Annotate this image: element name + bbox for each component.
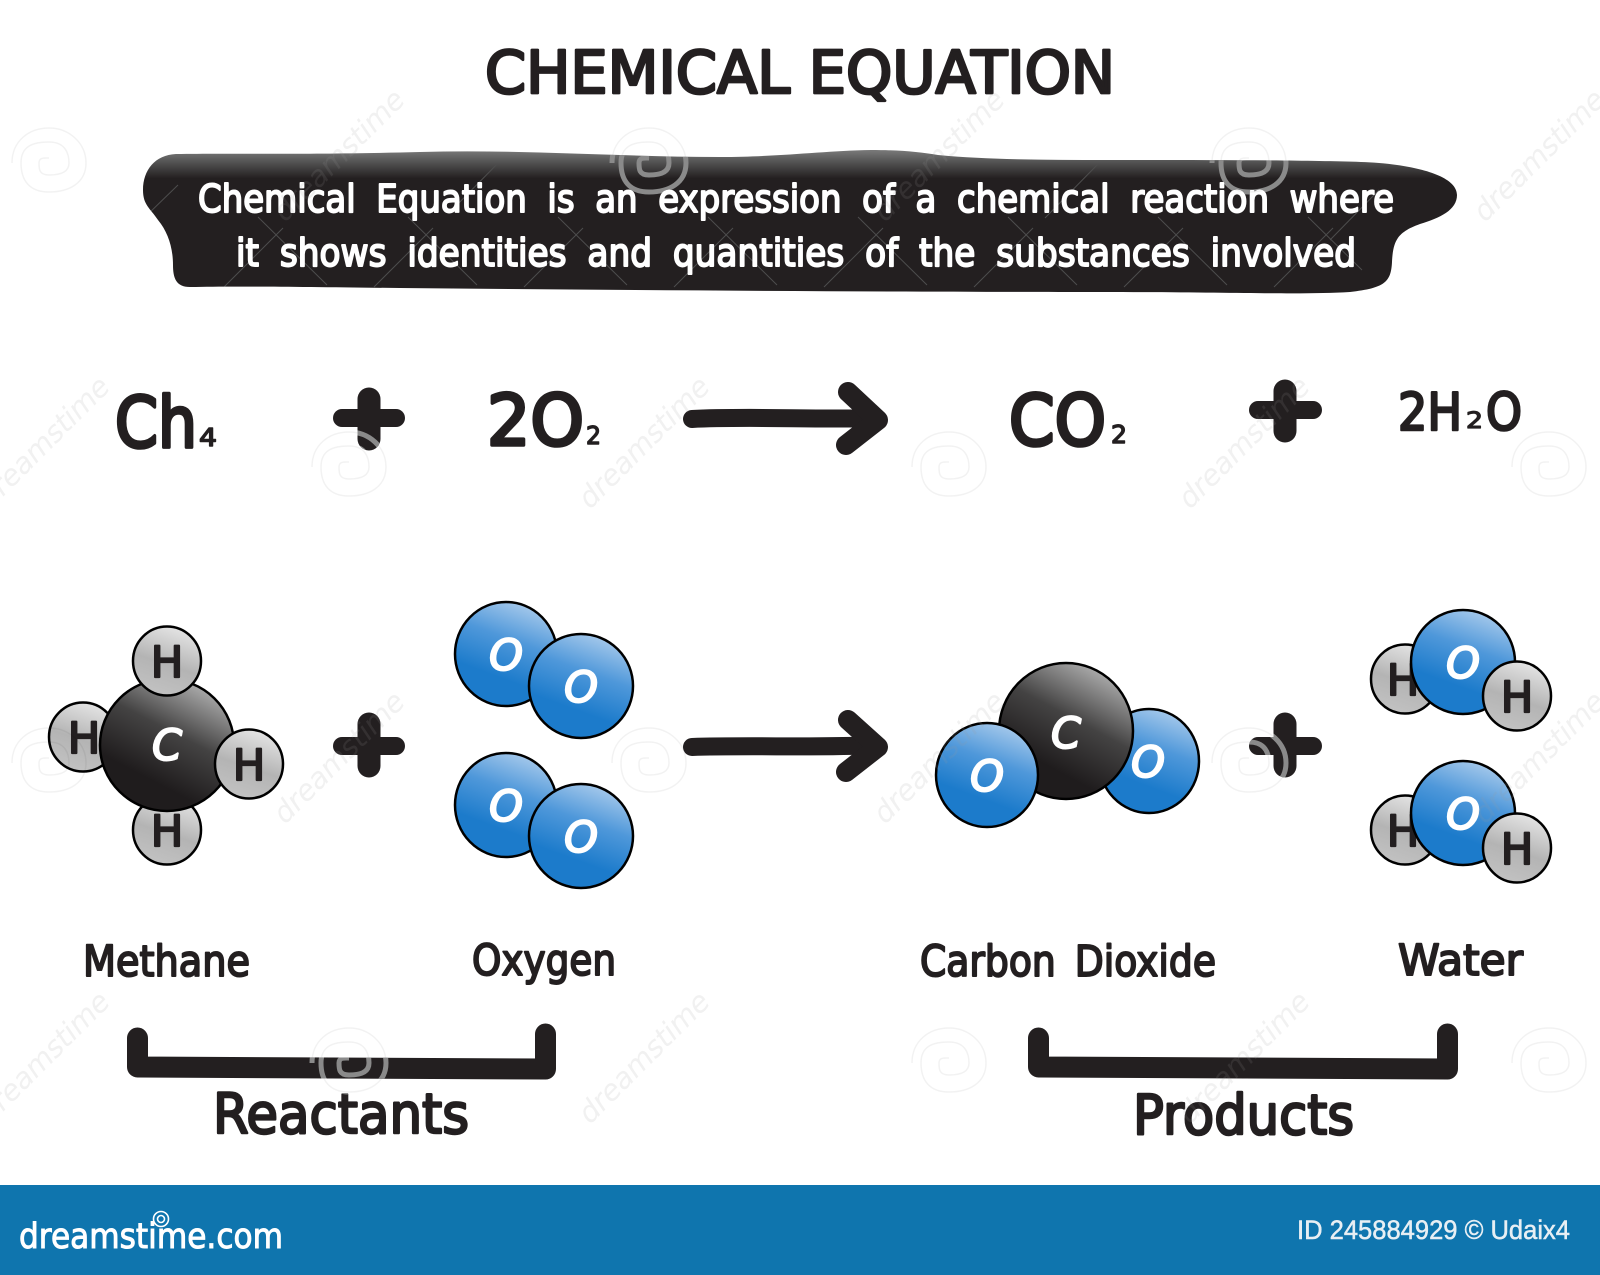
hydrogen atom left [49,702,117,772]
formula: 2H2O: 2 [1466,409,1483,434]
H2O molecule upper: O [1446,639,1480,689]
diagonal watermark text: dreamstime [866,684,1012,830]
footer bar [0,1185,1600,1275]
banner watermark lines [145,153,1379,287]
label: methane: Methane [83,937,250,987]
formula: 2O2: 2 [586,421,601,450]
label: water: Water [1398,936,1523,986]
footer logo text: dreamstime.com [19,1217,283,1257]
H2O molecule upper: H [1387,656,1419,706]
O2 molecule lower: O [564,813,598,863]
formula: CO2: 2 [1111,420,1127,449]
O2 molecule upper: O [489,631,523,681]
hydrogen atom right: H [233,741,265,791]
label: oxygen: Oxygen [472,936,616,986]
footer image id: ID 245884929 © Udaix4 [1297,1215,1570,1245]
oxygen atom left: O [970,752,1004,802]
plus sign [1258,391,1313,431]
diagonal watermark text: dreamstime [1171,984,1317,1130]
diagonal watermark text: dreamstime [866,82,1012,228]
O2 molecule lower [455,753,633,888]
formula: 2H2O: O [1486,383,1522,443]
molecule: carbon dioxide [936,663,1199,827]
hydrogen atom top: H [151,638,183,688]
bracket: reactants [138,1034,546,1069]
O2 molecule upper: O [564,663,598,713]
faint spirals on white [12,128,1586,1092]
plus sign [342,724,396,766]
heading: products: Products [1133,1083,1354,1147]
footer background [0,1185,1600,1275]
title: CHEMICAL EQUATION [485,38,1115,107]
H2O molecule upper [1371,610,1551,730]
H2O molecule lower: H [1501,825,1533,875]
footer logo spiral icon [154,1212,168,1226]
definition banner [143,150,1457,293]
hydrogen atom bottom [133,796,201,864]
arrow [692,720,878,772]
diagonal watermark text: dreamstime [266,82,412,228]
hydrogen atom top [133,626,201,696]
diagonal watermark text: dreamstime [1171,369,1317,515]
banner text line 2: it shows identities and quantities of the substances involved [236,231,1356,275]
formula: 2H2O [1398,383,1522,443]
banner shape [143,150,1457,293]
word equation row [115,380,1522,464]
formula: CH4: 4 [199,423,217,452]
H2O molecule lower [1371,761,1551,882]
oxygen atom left [936,723,1038,827]
formula: 2H2O: 2H [1398,383,1462,443]
H2O molecule lower: H [1387,807,1419,857]
hydrogen atom left: H [68,714,100,764]
bracket: products [1038,1034,1448,1069]
molecule: oxygen pair [455,602,633,888]
arrow [692,392,878,445]
label: carbon dioxide: Carbon Dioxide [920,937,1216,987]
hydrogen atom right [215,730,283,798]
diagonal watermark text: dreamstime [571,369,717,515]
H2O molecule lower: O [1446,790,1480,840]
O2 molecule upper [455,602,633,738]
formula: 2O2: 2O [487,380,584,462]
carbon atom [100,679,234,811]
heading: reactants: Reactants [213,1082,469,1146]
plus sign [342,399,396,439]
carbon atom: C [152,721,182,771]
plus sign [1258,724,1313,766]
hydrogen atom bottom: H [151,807,183,857]
O2 molecule lower: O [489,782,523,832]
H2O molecule upper: H [1501,673,1533,723]
formula: CH4: Ch [115,382,197,464]
oxygen atom right: O [1131,738,1165,788]
banner text line 1: Chemical Equation is an expression of a chemical reaction where [198,177,1394,221]
carbon atom: C [1051,709,1081,759]
spirals over dark shapes [312,128,1286,1092]
oxygen atom right [1099,709,1199,813]
molecule: methane [49,626,283,864]
diagonal watermark text: dreamstime [571,984,717,1130]
carbon atom [999,663,1133,799]
formula: CO2: CO [1009,380,1106,462]
molecule: water pair [1371,610,1551,882]
diagonal watermark text: dreamstime [266,684,412,830]
